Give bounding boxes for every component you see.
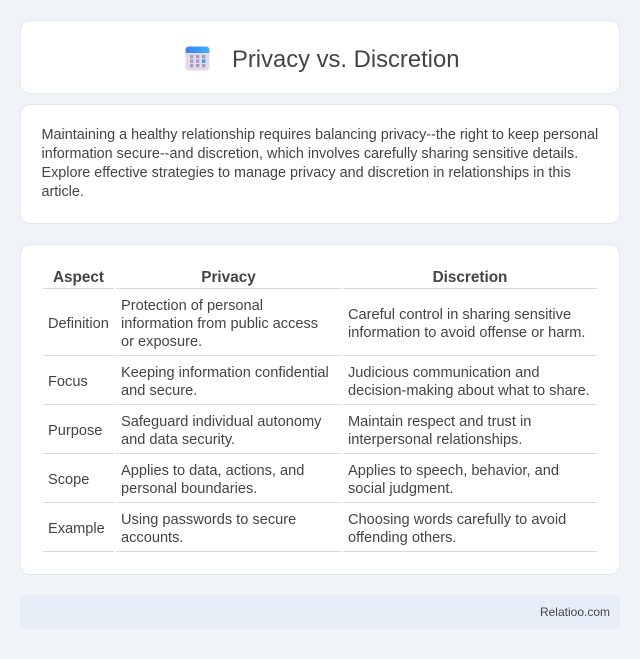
row: example [43,512,597,552]
row: focus: Judicious communication and [348,365,539,381]
row: purpose: Purpose [48,423,102,439]
row: definition: information to avoid offense or harm. [348,325,585,341]
row: example: offending others. [348,530,456,546]
table [43,269,597,552]
row: purpose: and data security. [121,432,235,448]
table header [43,269,597,289]
intro text: Maintaining a healthy relationship requires balancing privacy--the right to keep personal [42,127,598,143]
row: focus: Keeping information confidential [121,365,329,381]
row: purpose: interpersonal relationships. [348,432,522,448]
row: scope: Applies to speech, behavior, and [348,463,559,479]
row: purpose [43,414,597,454]
footer [20,595,620,629]
row: scope: social judgment. [348,481,453,497]
panel: comparison table [20,244,620,575]
row: example: Using passwords to secure [121,512,296,528]
row: scope: Applies to data, actions, and [121,463,304,479]
table header: Discretion [433,269,507,286]
row: example: accounts. [121,530,183,546]
row: scope: personal boundaries. [121,481,257,497]
table header: Aspect [53,269,104,286]
intro text: article. [42,184,84,200]
row: definition: information from public access [121,316,318,332]
title: Privacy vs. Discretion [232,46,459,73]
row: purpose: Safeguard individual autonomy [121,414,321,430]
panel: title card [20,20,620,94]
row: focus: Focus [48,374,88,390]
row: purpose: Maintain respect and trust in [348,414,531,430]
icon: calendar [186,46,210,70]
row: example: Choosing words carefully to avoid [348,512,566,528]
intro text: information secure--and discretion, which involves carefully sharing sensitive details. [42,146,578,162]
panel: intro [20,104,620,224]
row: example: Example [48,521,105,537]
row: focus: and secure. [121,383,197,399]
row: focus: decision-making about what to share. [348,383,590,399]
row: definition: Protection of personal [121,298,263,314]
intro text [42,127,598,200]
row: definition [43,298,597,356]
intro text: Explore effective strategies to manage privacy and discretion in relationships in this [42,165,571,181]
row: definition: Careful control in sharing sensitive [348,307,571,323]
row: focus [43,365,597,405]
row: scope [43,463,597,503]
row: definition: Definition [48,316,109,332]
footer credit: Relatioo.com [540,605,610,619]
table header: Privacy [201,269,256,286]
row: scope: Scope [48,472,89,488]
row: definition: or exposure. [121,334,202,350]
